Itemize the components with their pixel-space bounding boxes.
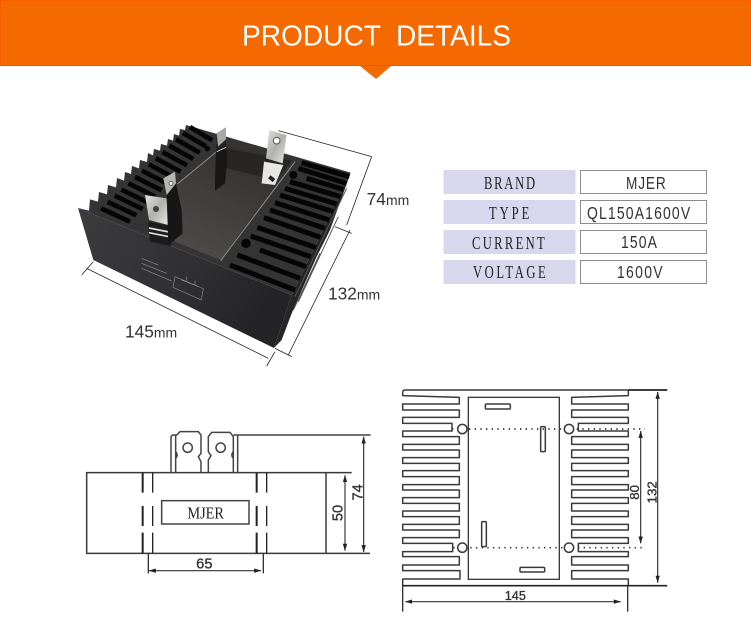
back wall <box>217 147 292 180</box>
row: voltage: 1600V <box>617 264 663 282</box>
dimension 80: 80 <box>627 485 642 500</box>
base lines <box>403 390 667 586</box>
dimension 65 <box>148 553 263 573</box>
dimension lines <box>82 131 372 366</box>
dimension 74 <box>350 437 366 552</box>
spec table <box>444 170 706 284</box>
row: current <box>444 230 706 254</box>
dimension 145: 145 <box>505 589 526 603</box>
left comb fins <box>403 390 628 586</box>
title: PRODUCT DETAILS <box>242 20 511 52</box>
dimension 50: 50 <box>330 505 346 521</box>
dimension 132: 132 <box>644 481 659 503</box>
dotted hole lines <box>452 429 645 548</box>
left terminal <box>145 172 183 246</box>
dimension 74: 74 <box>350 484 366 500</box>
row: current: CURRENT <box>472 234 545 254</box>
row: type <box>444 200 706 224</box>
nameplate: MJER <box>187 504 225 523</box>
heat sink side <box>274 173 351 348</box>
terminal slots <box>482 404 545 572</box>
mounting holes <box>205 146 297 248</box>
side view drawing <box>87 432 371 573</box>
nameplate <box>162 501 249 524</box>
row: voltage <box>444 260 706 284</box>
product photo: heat sink rectifier module <box>78 125 409 366</box>
dimension 145 <box>403 586 628 612</box>
row: current: 150A <box>621 234 657 252</box>
right fin slots <box>230 163 349 290</box>
mounting holes <box>458 424 574 552</box>
heat sink top with notched fin tips <box>78 125 351 295</box>
dimension 65: 65 <box>196 556 212 572</box>
label: 145mm: 145mm <box>125 321 177 341</box>
dimension 50 <box>330 475 346 551</box>
label: 132mm: 132mm <box>328 283 380 303</box>
header banner <box>0 0 751 79</box>
row: type: QL150A1600V <box>587 205 691 223</box>
label: 74mm: 74mm <box>367 189 409 209</box>
middle terminal <box>215 127 227 191</box>
row: type: TYPE <box>489 204 529 224</box>
center plate <box>468 397 559 579</box>
row: brand <box>444 170 706 194</box>
vertical dashed lines <box>143 473 267 553</box>
body outline <box>87 473 370 553</box>
right comb fins <box>572 390 628 586</box>
dimension 80 <box>627 431 642 543</box>
front face <box>78 208 292 348</box>
top view drawing <box>403 390 667 612</box>
row: brand: BRAND <box>484 174 535 194</box>
right terminal <box>262 130 287 185</box>
face markings <box>142 258 203 300</box>
left fin slots <box>101 127 212 222</box>
row: voltage: VOLTAGE <box>473 263 546 283</box>
row: brand: MJER <box>626 175 666 193</box>
channel floor <box>175 143 292 260</box>
terminals <box>171 432 371 473</box>
